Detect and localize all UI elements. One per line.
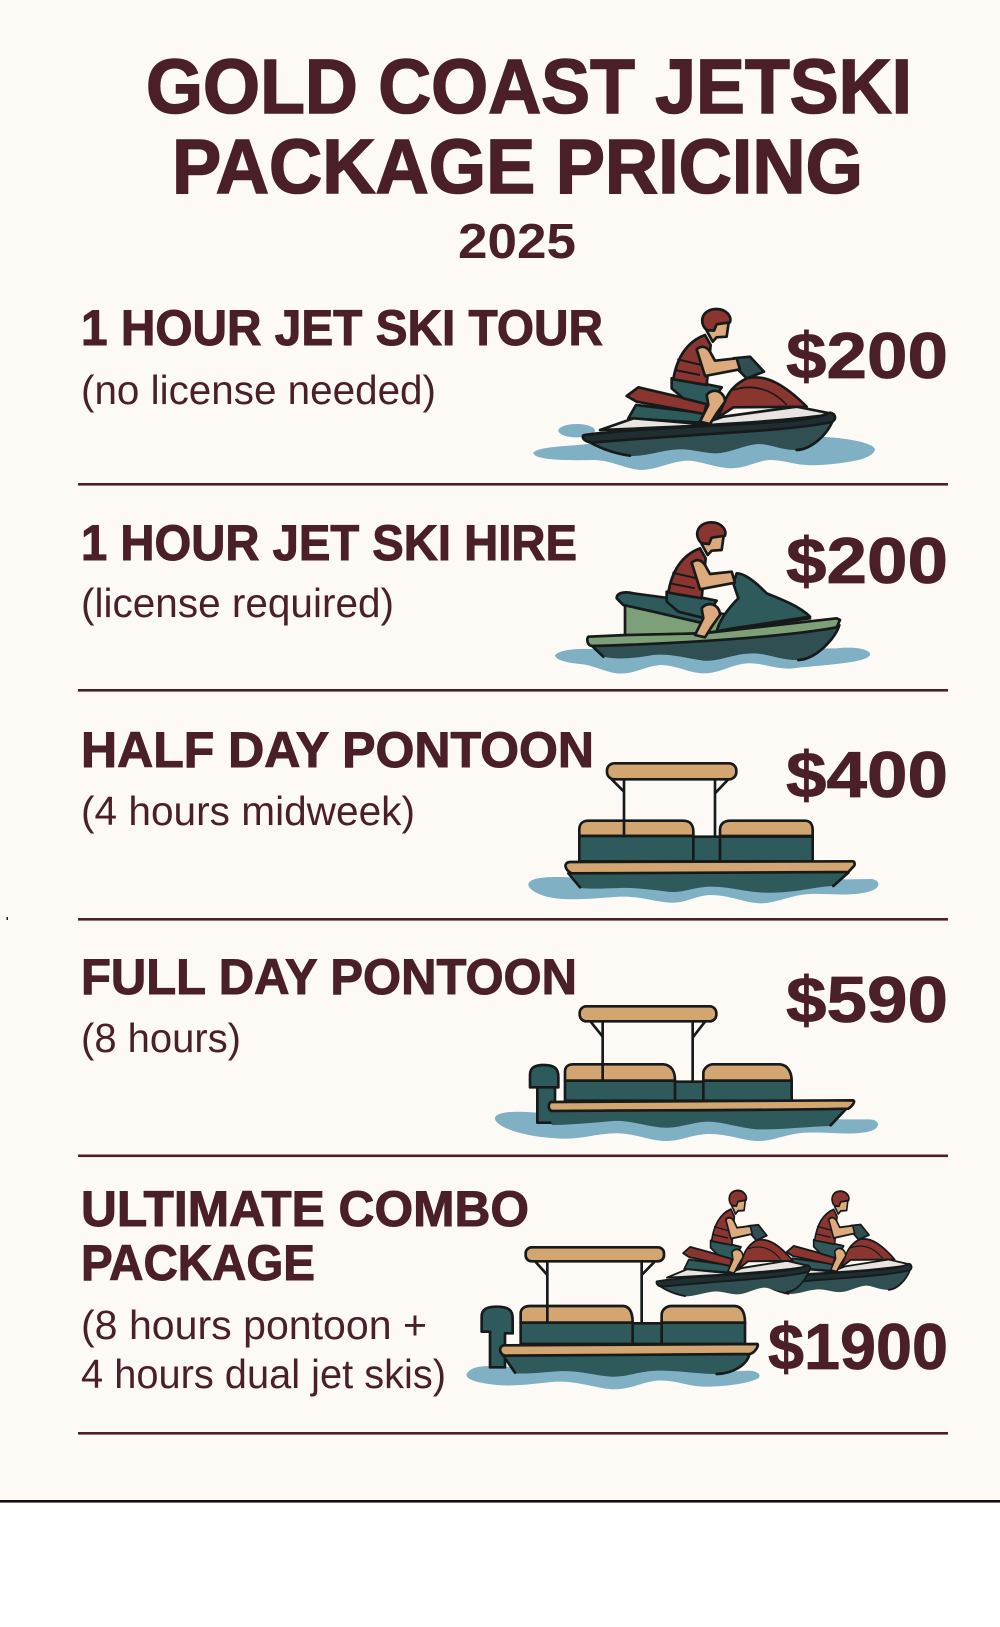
divider [78, 1432, 948, 1435]
price: $400: $400 [786, 738, 948, 811]
title [146, 44, 912, 210]
heading: full day pontoon: FULL DAY PONTOON [81, 949, 577, 1005]
icon: pontoon boat with motor [495, 1006, 878, 1141]
icon: red jet ski with rider [533, 309, 875, 470]
heading: ultimate combo package: ULTIMATE COMBO [81, 1181, 529, 1237]
panel: 1 hour jet ski hire [81, 515, 948, 674]
price: $1900: $1900 [768, 1310, 948, 1383]
heading: jet ski hire: 1 HOUR JET SKI HIRE [81, 515, 577, 571]
price: $200: $200 [786, 524, 948, 597]
price: $200: $200 [786, 319, 948, 392]
bottom border line [0, 1500, 1000, 1503]
note: no license needed: (no license needed) [81, 367, 436, 413]
divider [78, 918, 948, 921]
note: 8 hours pontoon plus 4 hours dual jet skis [81, 1302, 446, 1397]
divider [78, 689, 948, 692]
panel: half day pontoon [81, 722, 948, 903]
heading: ultimate combo package [81, 1181, 529, 1291]
title: GOLD COAST JETSKI [146, 44, 912, 130]
heading: ultimate combo package: PACKAGE [81, 1235, 315, 1291]
panel: ultimate combo package [81, 1181, 948, 1397]
price: $590: $590 [786, 963, 948, 1036]
note: license required: (license required) [81, 580, 394, 626]
icon: pontoon boat with motor [467, 1247, 760, 1389]
note: 8 hours: (8 hours) [81, 1015, 241, 1061]
title: PACKAGE PRICING [172, 124, 863, 210]
divider [78, 483, 948, 486]
icon: pontoon boat [528, 763, 878, 903]
divider [78, 1154, 948, 1157]
note: 8 hours pontoon plus 4 hours dual jet skis: (8 hours pontoon + [81, 1302, 427, 1348]
icon: two jet skis with riders [656, 1190, 912, 1296]
heading: half day pontoon: HALF DAY PONTOON [81, 722, 594, 778]
note: 8 hours pontoon plus 4 hours dual jet skis: 4 hours dual jet skis) [81, 1351, 446, 1397]
icon: green jet ski with rider [555, 522, 870, 674]
note: 4 hours midweek: (4 hours midweek) [81, 788, 415, 834]
heading: jet ski tour: 1 HOUR JET SKI TOUR [81, 300, 603, 356]
panel: full day pontoon [81, 949, 948, 1141]
panel: 1 hour jet ski tour [81, 300, 948, 470]
year subtitle: 2025 [458, 215, 576, 269]
